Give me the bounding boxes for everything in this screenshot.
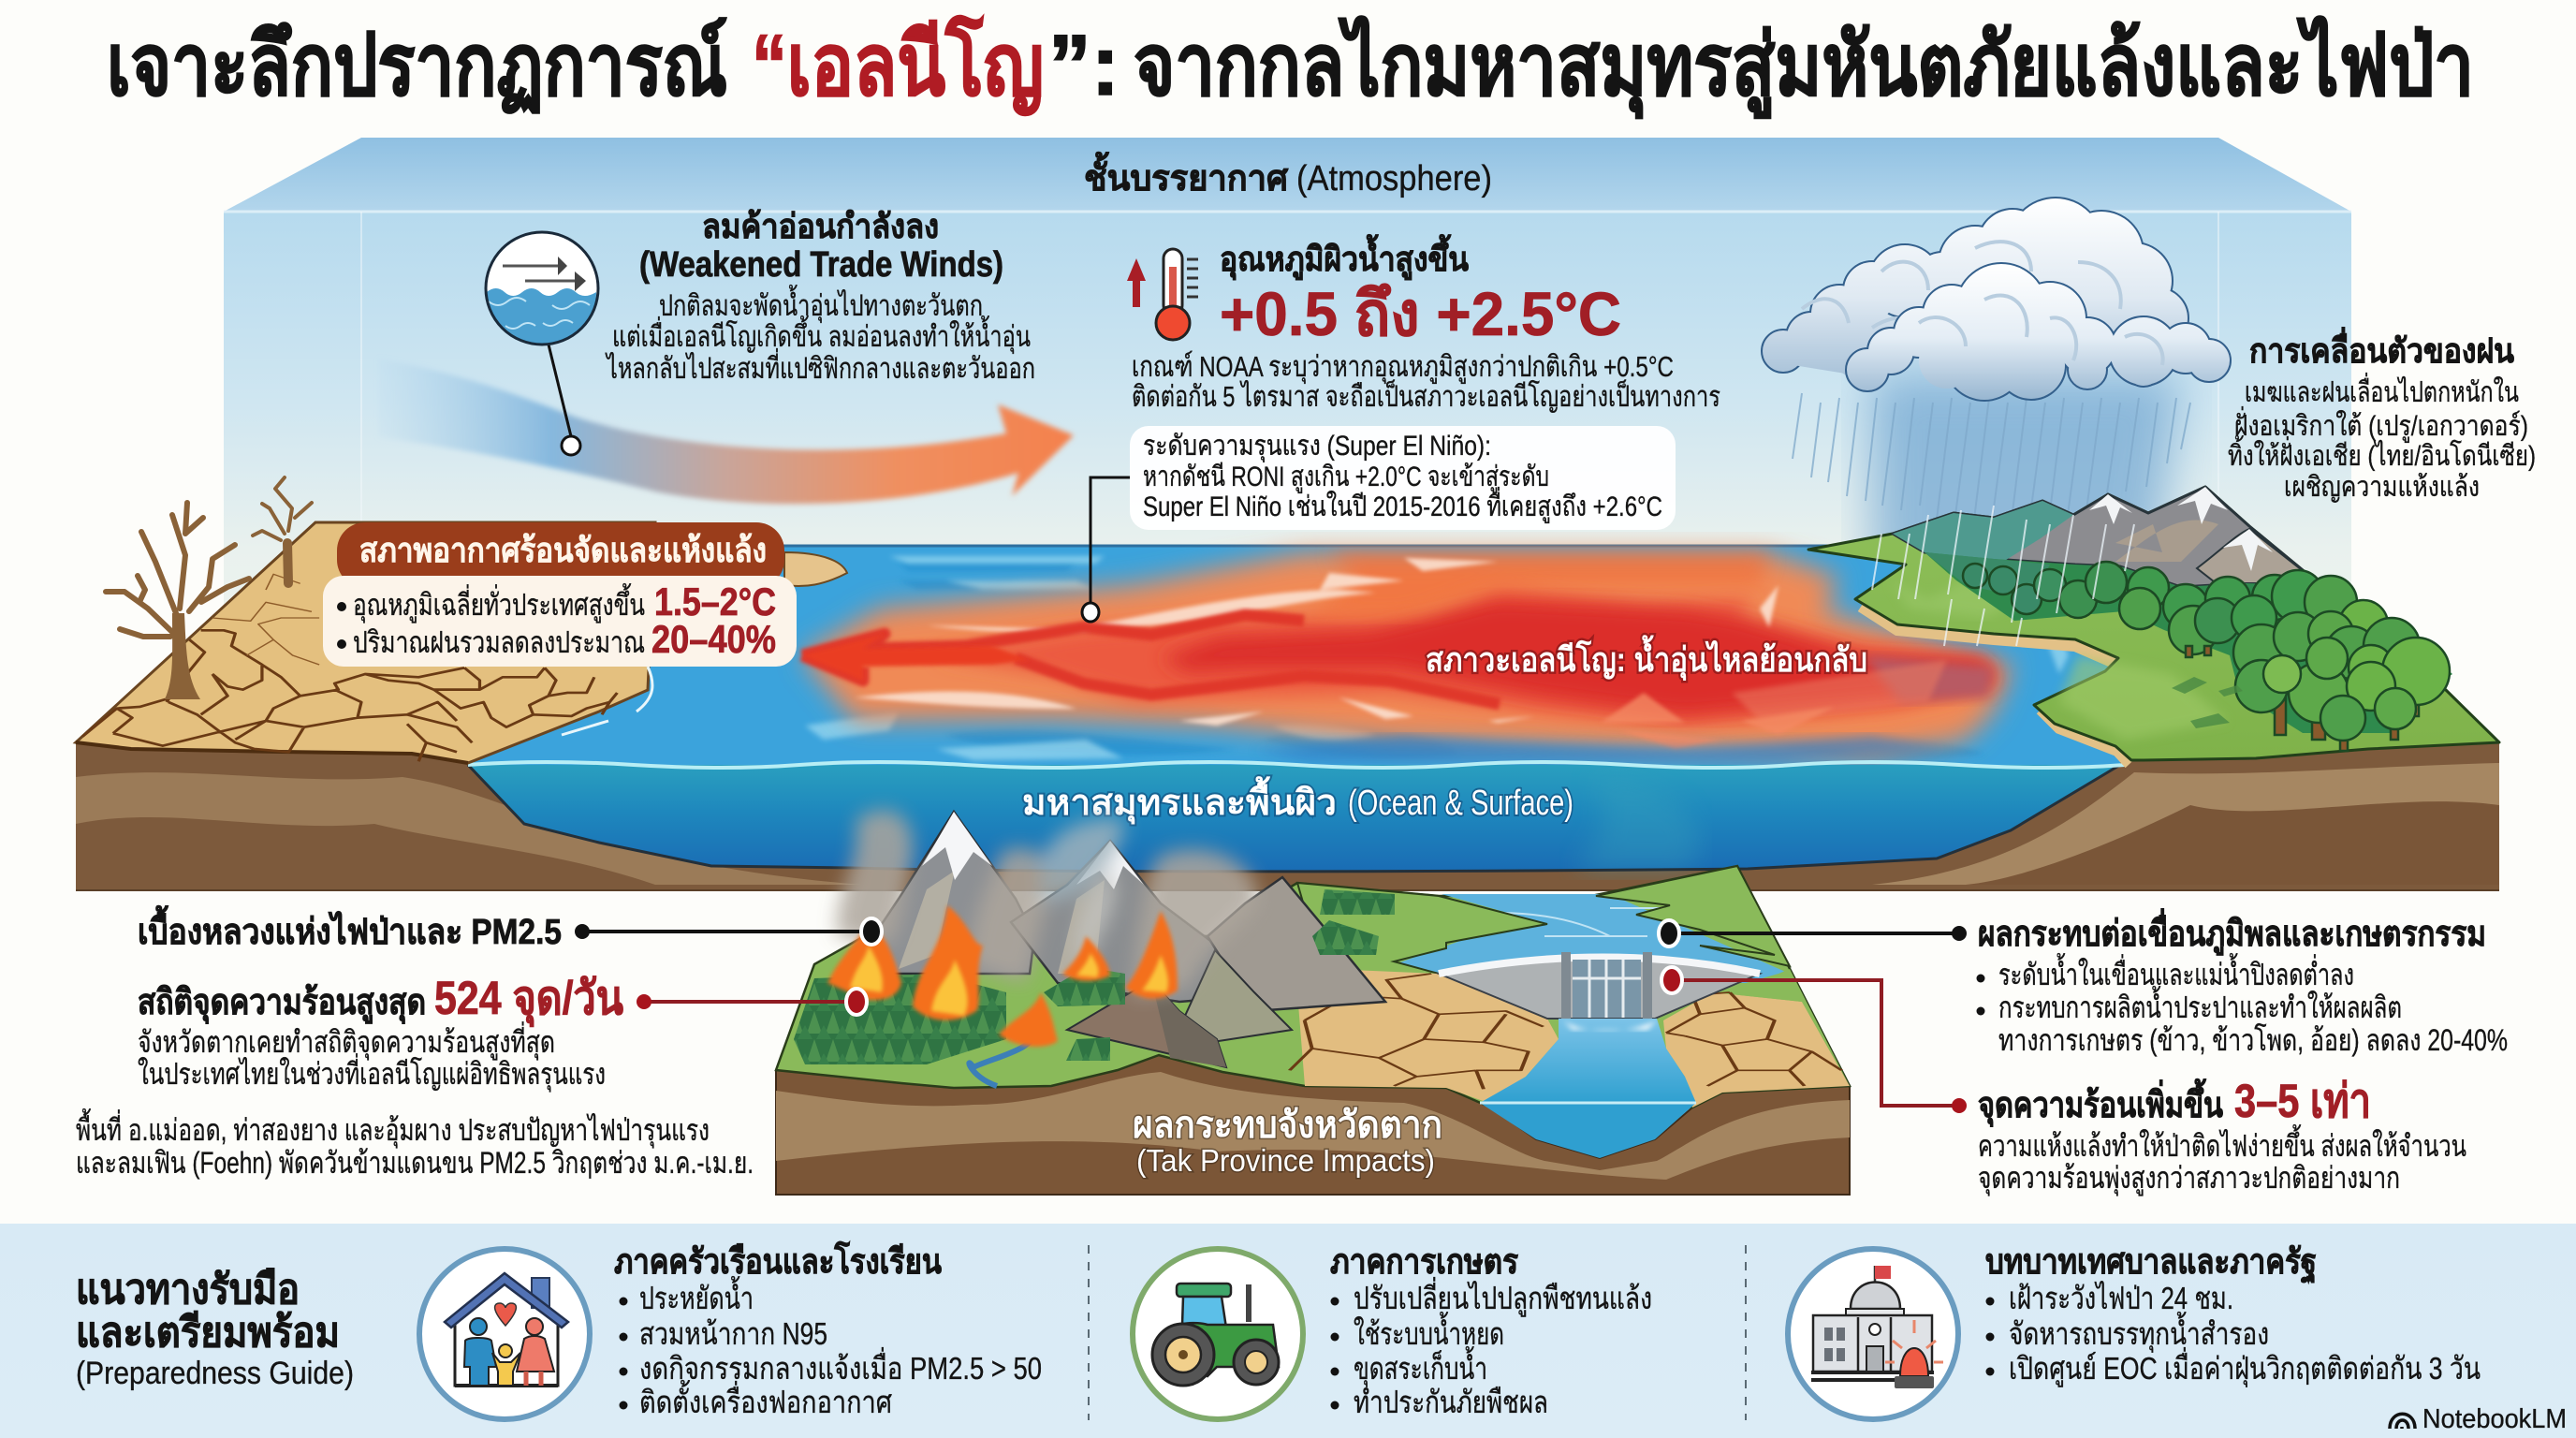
panel: hot and dry conditions: สภาพอากาศร้อนจัดและแห้งแล้ง [359, 531, 767, 569]
text: sea surface temperature: อุณหภูมิผิวน้ำสูงขึ้น [1220, 234, 1469, 281]
block front soil [776, 1055, 1850, 1195]
Tak block label: (Tak Province Impacts) [1136, 1143, 1435, 1178]
title [107, 15, 2474, 119]
left land: cracked drought soil [76, 522, 847, 763]
NotebookLM mark: NotebookLM [2422, 1404, 2567, 1434]
text: wildfire and PM2.5: สถิติจุดความร้อนสูงสุด [138, 983, 426, 1024]
text: weakened trade winds [605, 207, 1035, 385]
text: sea surface temperature: +0.5 ถึง +2.5°C [1220, 279, 1621, 348]
preparedness heading: และเตรียมพร้อม [76, 1310, 340, 1356]
mountains [1893, 487, 2319, 587]
cracked soil: left of dam [1297, 969, 1559, 1103]
text: households and schools [614, 1240, 1042, 1419]
text: agriculture: ใช้ระบบน้ำหยด [1354, 1312, 1504, 1351]
warm flow label: สภาวะเอลนีโญ: น้ำอุ่นไหลย้อนกลับ [1426, 635, 1867, 682]
text: agriculture: ภาคการเกษตร [1330, 1242, 1518, 1281]
text: weakened trade winds: ไหลกลับไปสะสมที่แปซิฟิกกลางและตะวันออก [605, 348, 1035, 385]
smoke [837, 810, 1259, 997]
Tak block label [1133, 1105, 1442, 1178]
icon: dead trees [106, 477, 312, 699]
preparedness heading [76, 1267, 354, 1391]
text: agriculture: ทำประกันภัยพืชผล [1354, 1385, 1548, 1419]
title: ”: [1048, 18, 1120, 113]
icon: wind and water bubble [486, 232, 598, 455]
text: dam and agriculture impact: ระดับน้ำในเขื่อนและแม่น้ำปิงลดต่ำลง [1998, 953, 2354, 991]
preparedness heading: (Preparedness Guide) [76, 1356, 354, 1391]
text: sea surface temperature: ติดต่อกัน 5 ไตรมาส จะถือเป็นสภาวะเอลนีโญอย่างเป็นทางการ [1132, 379, 1720, 413]
text: households and schools: ภาคครัวเรือนและโรงเรียน [614, 1240, 942, 1281]
panel: preparedness band [0, 1224, 2576, 1438]
text: municipality and state: จัดหารถบรรทุกน้ำสำรอง [2009, 1312, 2269, 1353]
icon: family house [419, 1249, 590, 1419]
text: wildfire and PM2.5: และลมเฟิน (Foehn) พัดควันข้ามแดนขน PM2.5 วิกฤตช่วง ม.ค.-เม.ย. [76, 1146, 754, 1180]
text: weakened trade winds: ลมค้าอ่อนกำลังลง [702, 207, 939, 245]
text: agriculture [1330, 1242, 1652, 1419]
text: households and schools: ติดตั้งเครื่องฟอกอากาศ [639, 1380, 892, 1419]
text: households and schools: งดกิจกรรมกลางแจ้งเมื่อ PM2.5 > 50 [639, 1347, 1042, 1386]
green hills [1297, 883, 1547, 992]
text: municipality and state: เฝ้าระวังไฟป่า 24 ชม. [2009, 1281, 2233, 1315]
back cloud [1763, 198, 2188, 379]
text: sea surface temperature: เกณฑ์ NOAA ระบุว่าหากอุณหภูมิสูงกว่าปกติเกิน +0.5°C [1132, 350, 1674, 385]
icon: thermometer with up arrow [1127, 249, 1198, 340]
connector: hotspot increase [1661, 967, 1967, 1113]
text: agriculture: ขุดสระเก็บน้ำ [1354, 1346, 1487, 1387]
connector: hotspot stat [637, 989, 867, 1015]
pine forests [794, 974, 1006, 1064]
right land: green forest [1808, 487, 2499, 764]
stream [969, 1030, 1034, 1086]
text: sea surface temperature [1132, 234, 1720, 413]
title: เจาะลึกปรากฏการณ์ [107, 17, 727, 114]
text: dam and agriculture impact: ผลกระทบต่อเขื่อนภูมิพลและเกษตรกรรม [1978, 908, 2486, 956]
text: dam and agriculture impact [1977, 908, 2508, 1057]
ground cross-section [76, 742, 2499, 891]
panel: Super El Nino callout: Super El Niño เช่นในปี 2015-2016 ที่เคยสูงถึง +2.6°C [1143, 487, 1662, 523]
arrow: weakening trade wind [378, 359, 1074, 504]
warm water core [1161, 599, 1994, 716]
panel: hot and dry conditions: ปริมาณฝนรวมลดลงประมาณ [353, 625, 645, 659]
panel: Super El Nino callout: ระดับความรุนแรง (Super El Niño): [1143, 431, 1491, 463]
text: wildfire and PM2.5: จังหวัดตากเคยทำสถิติจุดความร้อนสูงที่สุด [138, 1021, 555, 1061]
block top surface [776, 866, 1850, 1108]
reservoir [1395, 894, 1790, 983]
text: wildfire and PM2.5 [76, 905, 754, 1180]
text: households and schools: สวมหน้ากาก N95 [639, 1316, 827, 1351]
panel: atmosphere box [224, 138, 2351, 755]
text: rain movement: เผชิญความแห้งแล้ง [2284, 472, 2480, 503]
text: hotspots increase: จุดความร้อนพุ่งสูงกว่าสภาวะปกติอย่างมาก [1978, 1161, 2400, 1196]
arrow: warm water reverse flow [802, 615, 1500, 704]
text: wildfire and PM2.5: เบื้องหลวงแห่งไฟป่าและ PM2.5 [138, 905, 562, 952]
text: weakened trade winds: ปกติลมจะพัดน้ำอุ่นไปทางตะวันตก [659, 285, 983, 324]
river and pit [1480, 1019, 1696, 1103]
text: dam and agriculture impact: กระทบการผลิตน้ำประปาและทำให้ผลผลิต [1998, 986, 2402, 1024]
panel: Super El Nino callout [1130, 426, 1676, 530]
text: weakened trade winds: (Weakened Trade Winds) [639, 245, 1003, 285]
text: hotspots increase: 3–5 เท่า [2234, 1075, 2371, 1127]
title: “เอลนีโญ [752, 15, 1044, 116]
text: weakened trade winds: แต่เมื่อเอลนีโญเกิดขึ้น ลมอ่อนลงทำให้น้ำอุ่น [612, 315, 1031, 355]
text: rain movement [2228, 327, 2536, 503]
Tak block label: ผลกระทบจังหวัดตาก [1133, 1105, 1442, 1146]
atmosphere heading [1084, 152, 1492, 198]
ocean section label [1022, 776, 1573, 825]
panel: hot and dry conditions: อุณหภูมิเฉลี่ยทั่วประเทศสูงขึ้น [353, 583, 645, 624]
forest [1925, 552, 2452, 733]
text: wildfire and PM2.5: ในประเทศไทยในช่วงที่เอลนีโญแผ่อิทธิพลรุนแรง [138, 1053, 606, 1093]
icon: tractor [1133, 1249, 1303, 1419]
flames [827, 905, 1178, 1047]
cracked soil: right of dam [1663, 992, 1850, 1108]
ocean section label: มหาสมุทรและพื้นผิว [1022, 776, 1337, 825]
connector: dam impact [1659, 920, 1967, 946]
ocean section label: (Ocean & Surface) [1348, 784, 1573, 823]
connector: wildfire [575, 918, 882, 945]
panel: hot and dry conditions: 1.5–2°C [654, 580, 776, 624]
text: wildfire and PM2.5: 524 จุด/วัน [434, 972, 623, 1027]
panel: hot and dry conditions [323, 522, 797, 667]
atmosphere heading: (Atmosphere) [1296, 159, 1492, 198]
text: wildfire and PM2.5: พื้นที่ อ.แม่ออด, ท่าสองยาง และอุ้มผาง ประสบปัญหาไฟป่ารุนแรง [76, 1108, 710, 1149]
text: agriculture: ปรับเปลี่ยนไปปลูกพืชทนแล้ง [1354, 1277, 1652, 1317]
atmosphere heading: ชั้นบรรยากาศ [1084, 152, 1289, 198]
warm water outer glow [802, 552, 2012, 756]
connector: callout to warm pool [1082, 477, 1130, 622]
cloud and rain [1763, 198, 2230, 599]
panel: hot and dry conditions: 20–40% [651, 617, 776, 661]
preparedness heading: แนวทางรับมือ [76, 1267, 300, 1313]
text: rain movement: การเคลื่อนตัวของฝน [2249, 327, 2514, 370]
ocean surface [468, 546, 2134, 765]
front cloud [1847, 264, 2230, 400]
text: hotspots increase: จุดความร้อนเพิ่มขึ้น [1978, 1078, 2223, 1127]
dam [1439, 957, 1760, 1019]
Tak province block [776, 810, 1850, 1195]
soil cracks [82, 574, 617, 761]
icon: government building with siren [1788, 1249, 1958, 1419]
text: municipality and state [1985, 1242, 2481, 1387]
mountains [861, 812, 1034, 974]
text: hotspots increase [1978, 1075, 2466, 1196]
text: municipality and state: บทบาทเทศบาลและภาครัฐ [1985, 1242, 2317, 1284]
rain streaks [1872, 506, 2134, 646]
panel: Super El Nino callout: หากดัชนี RONI สูงเกิน +2.0°C จะเข้าสู่ระดับ [1143, 462, 1549, 493]
text: households and schools: ประหยัดน้ำ [639, 1276, 754, 1315]
warm water mid layer [936, 588, 1999, 726]
